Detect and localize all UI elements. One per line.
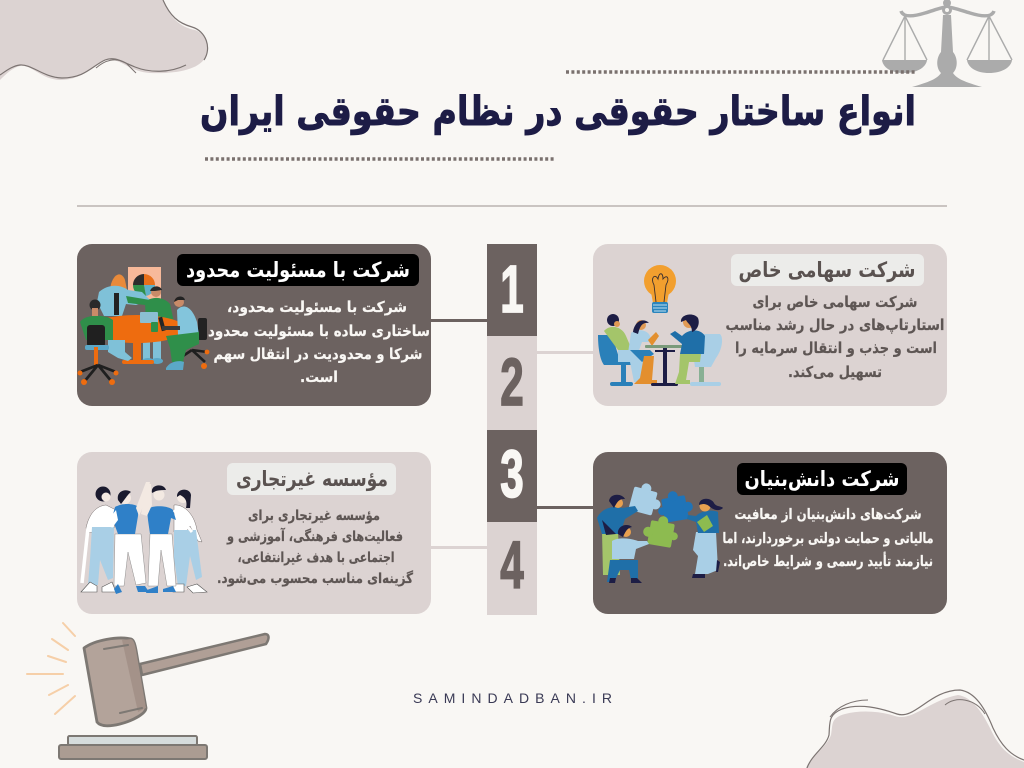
- number 3: [487, 430, 537, 522]
- panel: knowledge-based company: [593, 452, 947, 614]
- number 4: 4: [500, 527, 524, 602]
- body text: استارتاپ‌های در حال رشد مناسب: [726, 316, 944, 334]
- heading: شرکت با مسئولیت محدود: [186, 258, 410, 282]
- body text: شرکت با مسئولیت محدود،: [227, 298, 407, 316]
- illustration: people at table with light bulb: [598, 265, 722, 386]
- connector: panel 1: [431, 319, 487, 322]
- heading: [731, 254, 924, 286]
- number 2: 2: [500, 344, 524, 419]
- body text: تسهیل می‌کند.: [788, 363, 882, 381]
- number 4: [487, 522, 537, 615]
- number 2: [487, 336, 537, 430]
- body text: فعالیت‌های فرهنگی، آموزشی و: [226, 527, 403, 545]
- number 1: 1: [500, 251, 524, 326]
- body text: [722, 507, 934, 570]
- panel: limited liability company: [77, 244, 431, 406]
- body text: شرکا و محدودیت در انتقال سهم: [214, 345, 422, 363]
- body text: [726, 293, 944, 381]
- connector: panel 2: [537, 351, 593, 354]
- blob: top left: [0, 0, 208, 80]
- panel: private joint-stock company: [593, 244, 947, 406]
- heading: شرکت سهامی خاص: [738, 258, 916, 282]
- body text: است و جذب و انتقال سرمایه را: [735, 339, 937, 357]
- body text: مؤسسه غیرتجاری برای: [248, 508, 380, 524]
- body text: مالیاتی و حمایت دولتی برخوردارند، اما: [722, 531, 934, 547]
- body text: است.: [300, 368, 338, 386]
- illustration: four people high-five: [81, 482, 207, 594]
- body text: [208, 298, 430, 386]
- body text: شرکت سهامی خاص برای: [752, 293, 918, 311]
- body text: شرکت‌های دانش‌بنیان از معافیت: [734, 507, 922, 523]
- dotted line: top: [566, 70, 915, 74]
- number 1: [487, 244, 537, 336]
- heading: [177, 254, 419, 286]
- heading: [227, 463, 396, 495]
- icon: judge gavel: [27, 623, 269, 759]
- connector: panel 4: [537, 506, 593, 509]
- heading: شرکت دانش‌بنیان: [744, 467, 900, 491]
- number 3: 3: [500, 436, 524, 511]
- icon: scales of justice: [882, 0, 1012, 87]
- blob: bottom right: [806, 690, 1024, 768]
- illustration: team with puzzle pieces: [597, 481, 723, 583]
- body text: گزینه‌ای مناسب محسوب می‌شود.: [217, 570, 414, 587]
- heading: مؤسسه غیرتجاری: [236, 467, 388, 491]
- illustration: team meeting: [78, 267, 209, 385]
- connector: panel 3: [431, 546, 487, 549]
- body text: ساختاری ساده با مسئولیت محدود: [208, 322, 430, 340]
- footer website: SAMINDADBAN.IR: [413, 690, 612, 706]
- number column: [487, 244, 537, 615]
- body text: نیازمند تأیید رسمی و شرایط خاص‌اند.: [723, 552, 933, 570]
- dotted line: bottom: [205, 157, 554, 161]
- heading: [737, 463, 907, 495]
- body text: [217, 508, 414, 587]
- panel: non-commercial institute: [77, 452, 431, 614]
- body text: اجتماعی با هدف غیرانتفاعی،: [238, 550, 394, 566]
